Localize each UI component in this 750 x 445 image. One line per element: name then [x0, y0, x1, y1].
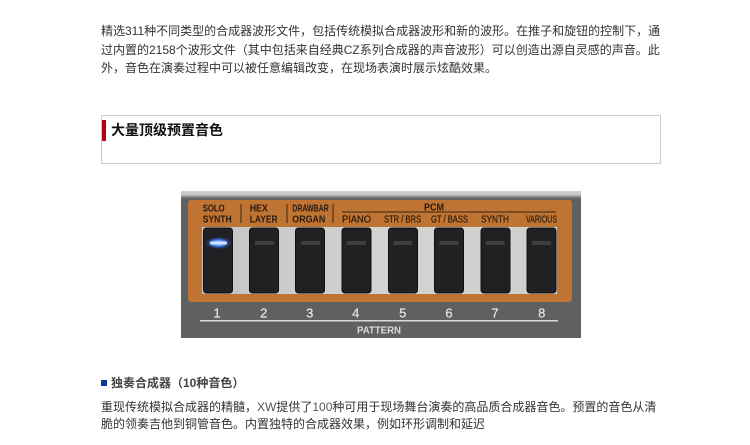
- category labels: VARIOUS: [526, 214, 557, 226]
- category labels: STR / BRS: [384, 214, 421, 226]
- panel background: [181, 191, 581, 338]
- text block: intro paragraph: 外，音色在演奏过程中可以被任意编辑改变，在现场表演时展示炫酷效果。: [101, 61, 497, 75]
- accent bar: [102, 120, 106, 141]
- category labels: SYNTH: [481, 214, 509, 226]
- text block: intro paragraph: [101, 24, 660, 75]
- pattern numbers: 3: [306, 306, 313, 320]
- pattern numbers: 4: [352, 306, 359, 320]
- text block: solo synth description: 重现传统模拟合成器的精髓，XW提供了100种可用于现场舞台演奏的高品质合成器音色。预置的音色从清: [101, 400, 656, 414]
- pattern numbers: 5: [399, 306, 406, 320]
- pattern numbers: 2: [260, 306, 267, 320]
- panel: section heading box: [101, 115, 661, 164]
- category labels: PCM: [424, 202, 444, 214]
- square bullet: [101, 380, 107, 386]
- pattern numbers: 1: [213, 306, 221, 320]
- pattern label: PATTERN: [357, 326, 401, 336]
- text block: intro paragraph: 过内置的2158个波形文件（其中包括来自经典CZ系列合成器的声音波形）可以创造出源自灵感的声音。此: [101, 42, 660, 56]
- category labels: PIANO: [342, 214, 371, 226]
- pattern numbers: [213, 306, 545, 320]
- category labels: DRAWBAR: [292, 204, 329, 214]
- tone buttons: [204, 228, 556, 293]
- category labels: SYNTH: [203, 214, 232, 226]
- category labels: ORGAN: [292, 214, 325, 226]
- category labels: SOLO: [203, 204, 225, 214]
- category labels: GT / BASS: [431, 214, 468, 226]
- text block: solo synth description: [101, 400, 656, 431]
- text block: solo synth description: 脆的领奏吉他到铜管音色。内置独特的合成器效果，例如环形调制和延迟: [101, 417, 485, 431]
- pattern bracket line: [200, 320, 558, 322]
- pattern numbers: 7: [491, 306, 499, 320]
- category labels: [203, 202, 557, 226]
- orange tone panel: [188, 200, 572, 302]
- heading: 大量顶级预置音色: [111, 122, 223, 138]
- subheading text: 独奏合成器（10种音色）: [111, 376, 244, 390]
- category labels: LAYER: [250, 214, 278, 226]
- category dividers: [241, 204, 556, 223]
- subheading: solo synth: [101, 376, 244, 390]
- lit indicator: [204, 236, 232, 250]
- button indicators: [255, 241, 551, 245]
- text block: intro paragraph: 精选311种不同类型的合成器波形文件，包括传统模拟合成器波形和新的波形。在推子和旋钮的控制下，通: [101, 24, 660, 38]
- pattern numbers: 6: [445, 306, 453, 320]
- category labels: HEX: [250, 204, 268, 214]
- illustration: synth tone buttons panel: [181, 191, 581, 338]
- pattern numbers: 8: [538, 306, 545, 320]
